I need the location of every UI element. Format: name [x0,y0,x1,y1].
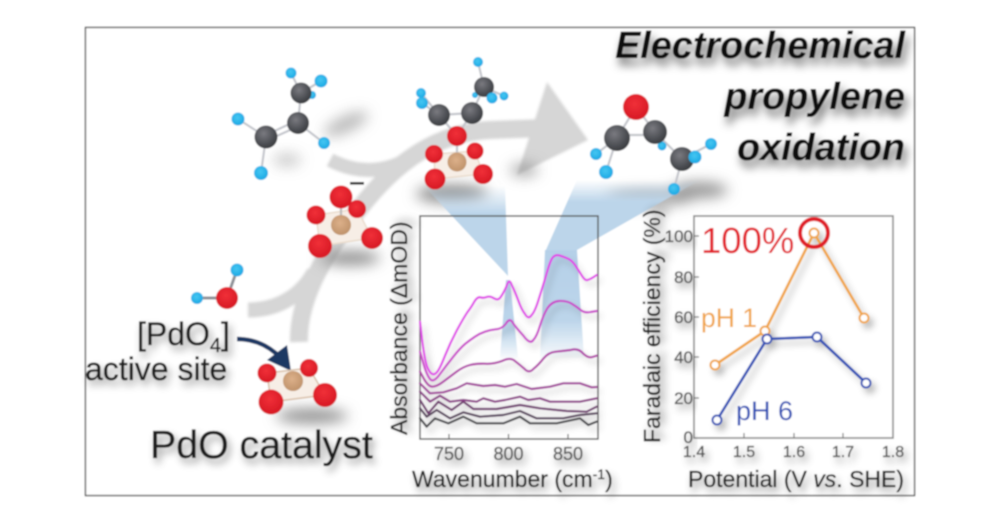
molecule: activated PdO4 site [306,182,383,258]
y tick labels: 60 [674,308,693,327]
x tick labels: 1.8 [882,444,904,461]
chart: absorbance spectra [386,216,613,492]
molecule: propylene oxide [590,94,717,195]
x tick labels: 800 [493,444,524,464]
label: active site: 4 [210,335,221,357]
y tick labels: 100 [665,227,693,246]
molecule shadows [273,107,728,423]
spectra lines [420,255,597,427]
label: active site: [PdO [137,316,210,352]
plot frame [694,216,893,438]
molecule: water [191,264,244,309]
title: oxidation [737,127,905,169]
y tick labels [665,227,693,447]
x tick labels [683,444,904,461]
spectral highlight beams [424,180,700,276]
plot frame [420,216,598,439]
chart: Faradaic efficiency [639,210,904,492]
y tick labels: 40 [674,348,693,367]
arrow to active site [237,339,291,371]
molecule: PdO catalyst site [258,359,337,414]
pH 6 series [712,332,870,424]
x tick labels: 1.7 [832,444,854,461]
label: PdO catalyst: PdO catalyst [150,423,373,467]
x axis title: Potential (V vs. SHE) [688,466,904,492]
reaction arrow [248,82,588,342]
x axis title: -1 [593,466,605,482]
title: propylene [723,76,905,118]
red circle marker [800,219,828,247]
x tick labels: 850 [553,444,583,464]
molecule: adsorbed intermediate [416,57,508,190]
y tick labels: 20 [674,389,693,408]
x axis title: ) [605,466,613,492]
pH 1 series [710,228,868,370]
100% callout: 100% [701,220,794,261]
x tick labels: 1.6 [783,444,805,461]
y tick labels: 0 [684,428,693,447]
label: active site: active site [85,351,227,387]
frame [86,28,914,496]
y tick labels: 80 [674,268,693,287]
x tick labels [434,444,583,464]
label: pH 6: pH 6 [736,396,793,426]
x tick labels: 1.4 [683,444,705,461]
x tick labels: 1.5 [733,444,755,461]
title [615,25,906,169]
spectral highlight bands [500,250,584,358]
label: pH 1: pH 1 [701,303,757,333]
y axis title: Faradaic efficiency (%) [639,210,665,443]
molecule: propylene [232,68,330,180]
y axis title: Absorbance (ΔmOD) [386,222,412,435]
x axis title: Wavenumber (cm [412,466,593,492]
charge sign [350,182,364,185]
x tick labels: 750 [434,444,464,464]
title: Electrochemical [615,25,906,67]
label: active site: ] [221,316,230,352]
label: active site [85,316,230,387]
